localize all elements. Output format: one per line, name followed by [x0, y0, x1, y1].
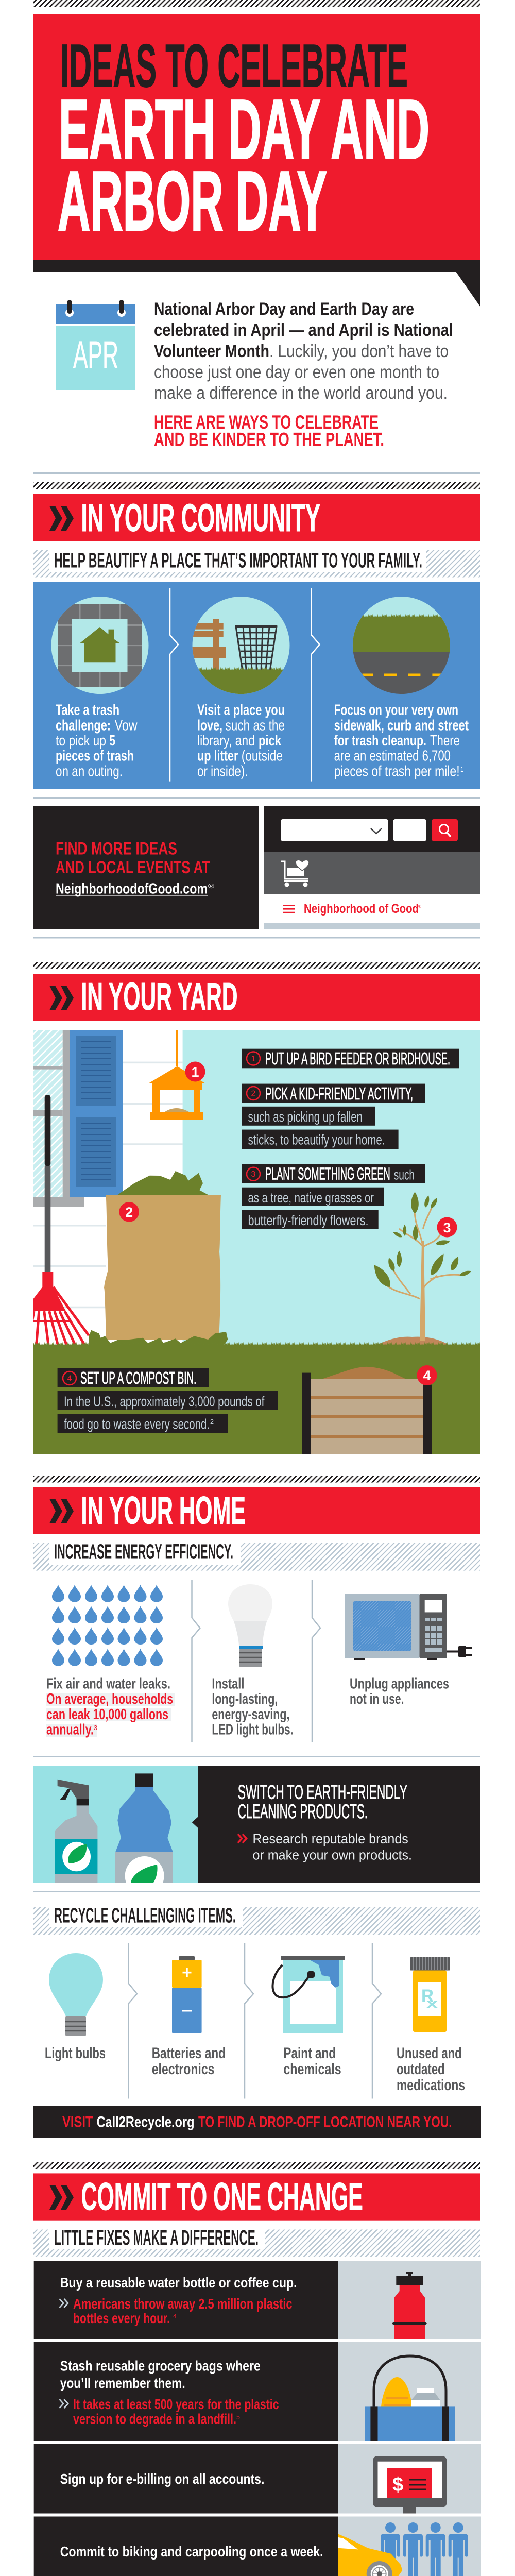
label 3: plant something green: 3	[251, 1170, 256, 1179]
text: visit a place: such as the	[226, 717, 285, 734]
text: visit a place: or inside).	[197, 763, 248, 779]
text: fix leaks	[46, 1676, 175, 1738]
icon: grocery bag	[365, 2356, 455, 2441]
text: LED bulbs: Install	[212, 1676, 244, 1692]
text: visit a place: up litter	[197, 748, 238, 764]
panel: find more ideas: NeighborhoodofGood.com	[56, 881, 208, 897]
label 2: kid-friendly activity	[242, 1084, 425, 1149]
text: LED bulbs	[212, 1676, 293, 1738]
text: trash challenge: to pick up	[56, 733, 106, 749]
text: fix leaks: On average, households	[46, 1691, 173, 1707]
label 4: compost bin	[58, 1368, 278, 1433]
intro text: National Arbor Day and Earth Day are	[154, 299, 414, 319]
heading: in your community: IN YOUR COMMUNITY	[81, 496, 320, 539]
text: focus on your sidewalk: There	[430, 733, 460, 749]
row: grocery bags: Stash reusable grocery bags where	[60, 2358, 261, 2374]
heading: in your home: IN YOUR HOME	[81, 1489, 246, 1532]
row: reusable bottle: Americans throw away 2.5 million plastic	[73, 2296, 293, 2312]
text: trash challenge: Vow	[115, 717, 138, 734]
intro text: Volunteer Month	[154, 342, 269, 361]
text: trash challenge: on an outing.	[56, 763, 123, 779]
row: grocery bags	[34, 2342, 481, 2441]
icon: monitor bill: $	[392, 2474, 403, 2496]
row: grocery bags: It takes at least 500 years for the plastic	[73, 2396, 279, 2412]
text: fix leaks: Fix air and water leaks.	[46, 1676, 170, 1692]
label 4: compost bin: 4	[67, 1375, 72, 1383]
text: trash challenge: Take a trash	[56, 702, 119, 718]
icon: pill bottle: x	[426, 1997, 438, 2011]
title banner	[33, 14, 480, 307]
row: e-billing	[34, 2444, 481, 2513]
marker 4	[417, 1365, 437, 1385]
heading: in your yard	[33, 974, 480, 1021]
site name: Neighborhood of Good	[304, 902, 419, 916]
icon: pill bottle: R	[421, 1986, 434, 2006]
label: paint: chemicals	[283, 2061, 341, 2078]
panel: community ideas	[33, 582, 480, 789]
text: unplug appliances: not in use.	[350, 1691, 404, 1707]
label: batteries: Batteries and	[152, 2045, 226, 2062]
intro text	[154, 299, 453, 403]
icon: monitor bill	[373, 2456, 447, 2513]
subheading: little fixes: LITTLE FIXES MAKE A DIFFERENCE.	[54, 2226, 259, 2249]
label: light bulbs: Light bulbs	[45, 2045, 106, 2062]
row: reusable bottle: Buy a reusable water bottle or coffee cup.	[60, 2275, 297, 2291]
icon: water bottle	[392, 2272, 427, 2339]
callout: call2recycle: Call2Recycle.org	[97, 2114, 195, 2131]
text: switch products: CLEANING PRODUCTS.	[238, 1801, 368, 1823]
intro text: choose just one day or even one month to	[154, 363, 439, 382]
label 4: compost bin: SET UP A COMPOST BIN.	[80, 1368, 196, 1387]
row: grocery bags: 5	[236, 2413, 240, 2421]
panel: find more ideas	[33, 806, 259, 929]
callout: call2recycle: VISIT	[62, 2114, 93, 2131]
label: paint: Paint and	[283, 2045, 336, 2062]
call to action	[154, 412, 384, 450]
icon: paint can	[272, 1956, 345, 2033]
panel: yard illustration	[28, 1030, 480, 1454]
callout: call2recycle	[33, 2106, 481, 2138]
text: focus on your sidewalk: Focus on your very own	[334, 702, 458, 718]
marker 2	[119, 1202, 139, 1222]
icon: light bulb	[49, 1953, 103, 2036]
label 2: kid-friendly activity: such as picking up fallen	[248, 1109, 363, 1125]
label 3: plant something green	[242, 1164, 425, 1229]
text: visit a place: love,	[197, 717, 222, 734]
text: trash challenge: 5	[109, 733, 115, 749]
panel: find more ideas: AND LOCAL EVENTS AT	[56, 858, 210, 877]
label: medications: medications	[397, 2077, 465, 2094]
illustration: bird feeder	[148, 1030, 205, 1120]
marker 4: 4	[423, 1368, 431, 1383]
illustration: rake	[28, 1095, 89, 1345]
intro text: celebrated in April — and April is National	[154, 320, 453, 340]
text: visit a place: library, and	[197, 733, 255, 749]
text: LED bulbs: long-lasting,	[212, 1691, 278, 1707]
ground	[33, 1341, 480, 1454]
panel: find more ideas: ®	[208, 882, 215, 890]
illustration: road	[352, 597, 450, 696]
row: reusable bottle	[34, 2261, 481, 2339]
subheading: little fixes	[33, 2226, 480, 2257]
icon: water drops	[52, 1585, 163, 1666]
label 2: kid-friendly activity: 2	[251, 1089, 256, 1098]
marker 1: 1	[191, 1064, 199, 1080]
illustration: blue bottle	[115, 1773, 173, 1883]
text: focus on your sidewalk: 1	[460, 765, 464, 773]
label: medications: outdated	[397, 2061, 445, 2078]
row: carpool: Commit to biking and carpooling once a week.	[60, 2544, 323, 2560]
label 2: kid-friendly activity: sticks, to beautify your home.	[248, 1132, 385, 1148]
label: medications	[397, 2045, 465, 2094]
label 4: compost bin: 2	[210, 1418, 214, 1426]
heading: in your yard: IN YOUR YARD	[81, 975, 238, 1018]
row: grocery bags: version to degrade in a landfill.	[73, 2411, 236, 2427]
text: fix leaks: 3	[94, 1724, 97, 1732]
text: fix leaks: annually.	[46, 1722, 94, 1738]
label: batteries: electronics	[152, 2061, 214, 2078]
row: reusable bottle: 4	[173, 2312, 177, 2320]
text: unplug appliances	[350, 1676, 449, 1707]
row: carpool	[34, 2516, 481, 2576]
marker 3	[437, 1217, 457, 1238]
heading: in your home	[33, 1487, 480, 1534]
panel: find more ideas: FIND MORE IDEAS	[56, 839, 177, 858]
text: visit a place: (outside	[242, 748, 283, 764]
icon: shopping cart with heart	[281, 860, 309, 887]
label 3: plant something green: such	[394, 1167, 415, 1183]
row: e-billing: Sign up for e-billing on all accounts.	[60, 2471, 264, 2487]
text: LED bulbs: LED light bulbs.	[212, 1722, 293, 1738]
panel: cleaning products	[33, 1766, 480, 1895]
text: focus on your sidewalk: for trash cleanup.	[334, 733, 426, 749]
row: reusable bottle: bottles every hour.	[73, 2310, 170, 2326]
illustration: sapling	[370, 1192, 472, 1345]
label 3: plant something green: butterfly-friendly flowers.	[248, 1212, 369, 1228]
text: trash challenge: challenge:	[56, 717, 111, 734]
illustration: leaf bag	[89, 1171, 228, 1346]
label: paint	[283, 2045, 341, 2078]
marker 2: 2	[125, 1205, 133, 1220]
text: unplug appliances: Unplug appliances	[350, 1676, 449, 1692]
text: visit a place: pick	[259, 733, 282, 749]
text: switch products	[238, 1782, 412, 1862]
illustration: spray bottle	[55, 1780, 97, 1883]
label: medications: Unused and	[397, 2045, 462, 2062]
icon: calendar: APR	[73, 333, 118, 376]
site name: ®	[418, 904, 421, 909]
label 4: compost bin: food go to waste every second.	[64, 1416, 210, 1432]
intro text: make a difference in the world around you.	[154, 383, 448, 403]
text: trash challenge: pieces of trash	[56, 748, 134, 764]
icon: LED bulb	[228, 1584, 272, 1667]
icon: people and car	[338, 2522, 481, 2576]
illustration: compost bin	[302, 1367, 432, 1454]
icon: calendar	[56, 300, 135, 390]
text: visit a place	[197, 702, 285, 779]
row: grocery bags: you’ll remember them.	[60, 2375, 185, 2391]
intro text: . Luckily, you don’t have to	[269, 342, 449, 361]
text: LED bulbs: energy-saving,	[212, 1706, 289, 1723]
subheading: recycle challenging items	[33, 1904, 480, 1935]
marker 1	[185, 1061, 205, 1082]
label: batteries	[152, 2045, 226, 2078]
label 1: bird feeder: 1	[251, 1055, 256, 1063]
icon: microwave	[345, 1594, 472, 1660]
text: focus on your sidewalk: sidewalk, curb and street	[334, 717, 469, 734]
text: focus on your sidewalk: are an estimated 6,700	[334, 748, 451, 764]
marker 3: 3	[443, 1220, 451, 1235]
text: focus on your sidewalk	[334, 702, 469, 779]
text: trash challenge	[56, 702, 138, 779]
text: focus on your sidewalk: pieces of trash per mile!	[334, 763, 460, 779]
illustration: house map	[51, 597, 149, 694]
illustration: window and shutter	[33, 1030, 123, 1207]
illustration: sign and trash can	[191, 597, 294, 696]
text: visit a place: Visit a place you	[197, 702, 285, 718]
icon: battery	[172, 1956, 202, 2033]
label 3: plant something green: PLANT SOMETHING GREEN	[265, 1164, 390, 1183]
subheading: recycle challenging items: RECYCLE CHALLENGING ITEMS.	[54, 1904, 236, 1927]
search form	[281, 819, 458, 841]
text: fix leaks: can leak 10,000 gallons	[46, 1706, 168, 1723]
panel: website mockup	[264, 806, 480, 929]
icon: menu	[283, 906, 295, 912]
subheading: energy efficiency	[33, 1540, 480, 1571]
call to action: HERE ARE WAYS TO CELEBRATE	[154, 412, 379, 433]
label 3: plant something green: as a tree, native grasses or	[248, 1190, 374, 1206]
subheading: energy efficiency: INCREASE ENERGY EFFICIENCY.	[54, 1540, 233, 1564]
call to action: AND BE KINDER TO THE PLANET.	[154, 429, 384, 450]
label 4: compost bin: In the U.S., approximately 3,000 pounds of	[64, 1393, 265, 1410]
text: switch products: or make your own products.	[252, 1847, 412, 1862]
icon: pill bottle	[410, 1957, 450, 2032]
text: switch products: Research reputable brands	[252, 1831, 408, 1846]
